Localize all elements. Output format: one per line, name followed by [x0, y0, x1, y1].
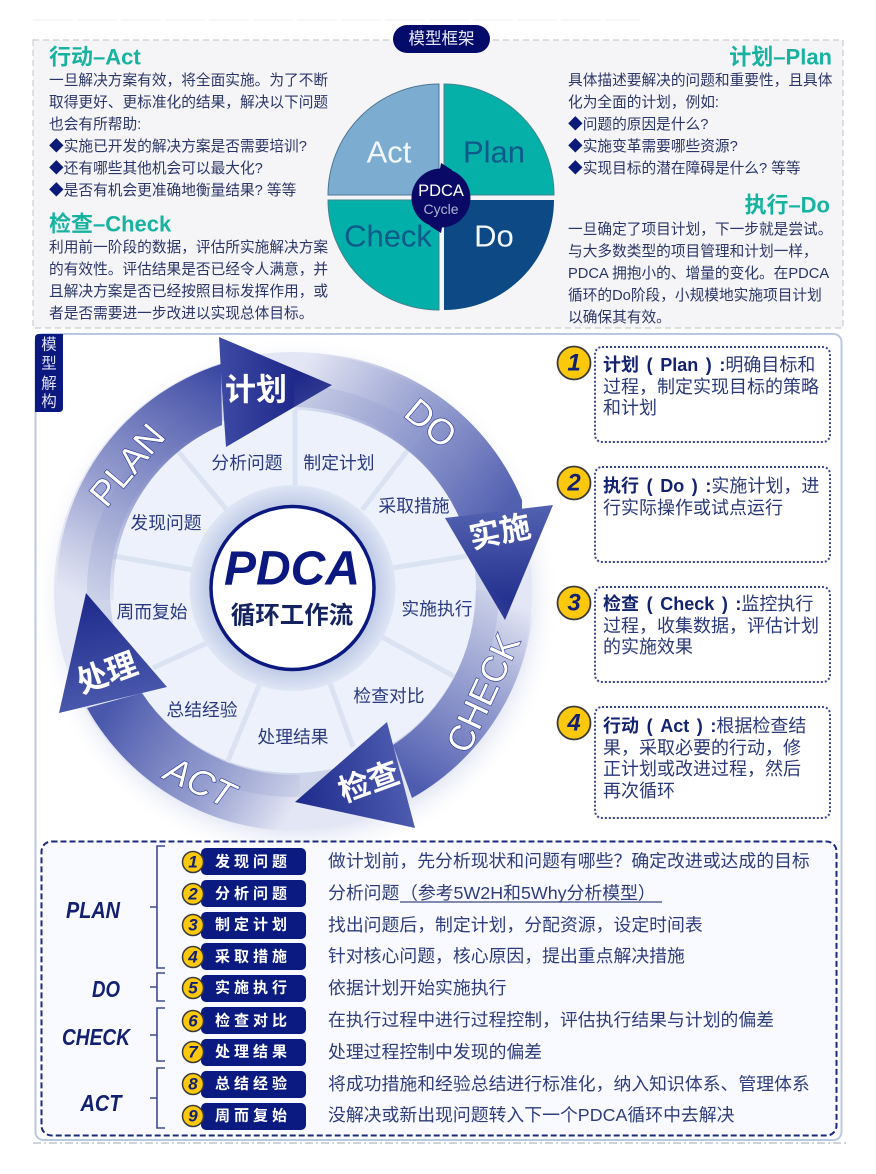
- step 3: [182, 912, 703, 939]
- step 9: 没解决或新出现问题转入下一个PDCA循环中去解决: [328, 1105, 735, 1125]
- wheel segment labels: 处理结果: [257, 727, 329, 747]
- step 6: 在执行过程中进行过程控制，评估执行结果与计划的偏差: [328, 1010, 774, 1030]
- wheel ring base: [83, 381, 503, 801]
- text block: Plan: 具体描述要解决的问题和重要性，且具体: [568, 72, 833, 89]
- text block: Plan: [568, 44, 833, 177]
- wheel disc: [110, 407, 476, 773]
- step 8: 将成功措施和经验总结进行标准化，纳入知识体系、管理体系: [328, 1074, 810, 1094]
- card: step 1 plan: 过程，制定实现目标的策略: [603, 377, 819, 397]
- arrow: plan: PLAN: [81, 416, 173, 514]
- text block: Check: [49, 212, 328, 322]
- panel: model framework: [33, 25, 843, 328]
- text block: Check: 者是否需要进一步改进以实现总体目标。: [49, 305, 313, 322]
- brackets: [150, 846, 165, 1128]
- text block: Plan: 计划–Plan: [729, 44, 832, 70]
- wheel segment labels: [116, 453, 473, 747]
- chart: PDCA pie: Check: [344, 218, 432, 254]
- card: step 1 plan: 计划 ( Plan ) :明确目标和: [603, 355, 815, 375]
- text block: Act: ◆是否有机会更准确地衡量结果? 等等: [49, 181, 297, 199]
- tag: model breakdown: 解: [41, 374, 57, 392]
- text block: Act: 一旦解决方案有效，将全面实施。为了不断: [49, 71, 328, 89]
- step 9: [182, 1103, 735, 1130]
- step 6: 检查对比: [215, 1012, 291, 1030]
- step 8: 8: [188, 1074, 198, 1094]
- text block: Act: ◆还有哪些其他机会可以最大化?: [49, 160, 263, 177]
- text block: Do: 循环的Do阶段，小规模地实施项目计划: [568, 287, 822, 304]
- card: step 2 do: [558, 466, 830, 562]
- text block: Check: 且解决方案是否已经按照目标发挥作用，或: [49, 282, 328, 300]
- chart: PDCA pie: Plan: [463, 134, 525, 170]
- step 3: 制定计划: [215, 916, 291, 934]
- card: step 3 check: 过程，收集数据，评估计划: [603, 616, 819, 636]
- wheel center: 循环工作流: [231, 602, 353, 630]
- step 4: [182, 943, 685, 970]
- step 2: 分析问题: [328, 883, 400, 903]
- phase labels: DO: [92, 976, 120, 1002]
- arrow: plan: [57, 337, 332, 600]
- arrow: do: DO: [397, 390, 465, 456]
- text block: Do: 一旦确定了项目计划，下一步就是尝试。: [568, 221, 832, 238]
- heading pill: model framework: [393, 25, 490, 53]
- step 6: 6: [188, 1012, 198, 1030]
- step 2: [182, 880, 662, 907]
- arrow: act: 处理: [72, 646, 142, 700]
- step 7: 7: [188, 1042, 199, 1062]
- card: step 3 check: 3: [567, 590, 581, 616]
- step 2: 2: [187, 884, 198, 904]
- step 8: 总结经验: [215, 1074, 291, 1092]
- card: step 4 act: [558, 706, 830, 818]
- wheel segment labels: 分析问题: [211, 453, 283, 473]
- wheel hub: [190, 485, 396, 691]
- chart: PDCA pie: Act: [367, 134, 412, 170]
- step 4: 采取措施: [215, 948, 291, 966]
- phase labels: CHECK: [62, 1024, 131, 1050]
- text block: Act: [49, 44, 328, 199]
- card: step 1 plan: 和计划: [603, 398, 657, 418]
- card: step 1 plan: [558, 346, 830, 442]
- text block: Check: 的有效性。评估结果是否已经令人满意，并: [49, 260, 328, 278]
- wheel segment labels: 周而复始: [116, 602, 188, 622]
- text block: Plan: ◆实现目标的潜在障碍是什么? 等等: [568, 159, 801, 177]
- step 4: 4: [187, 948, 198, 966]
- icon: PDCA cycle hub: Cycle: [423, 201, 459, 217]
- text block: Do: 以确保其有效。: [568, 309, 671, 326]
- wheel segment labels: 采取措施: [378, 496, 450, 516]
- tag: model breakdown: 型: [41, 354, 57, 372]
- heading pill: model framework: 模型框架: [408, 29, 474, 48]
- arrow: act: [59, 593, 300, 831]
- wheel segment labels: 发现问题: [130, 513, 202, 533]
- chart: PDCA wheel: [33, 336, 561, 864]
- step 3: 3: [188, 916, 198, 934]
- text block: Check: 检查–Check: [49, 212, 172, 236]
- arrow: check: CHECK: [438, 627, 528, 759]
- step 8: [182, 1071, 810, 1098]
- text block: Act: 行动–Act: [49, 44, 141, 70]
- panel: nine steps table: [42, 842, 836, 1136]
- text block: Plan: ◆实施变革需要哪些资源?: [568, 138, 738, 155]
- step 1: 发现问题: [215, 852, 291, 870]
- wheel segment labels: 实施执行: [401, 599, 473, 619]
- text block: Act: 取得更好、更标准化的结果，解决以下问题: [49, 94, 328, 111]
- step 5: [182, 975, 507, 1002]
- icon: PDCA cycle hub: PDCA: [418, 182, 464, 200]
- wheel segment labels: 制定计划: [303, 453, 375, 473]
- card: step 4 act: 再次循环: [603, 781, 675, 801]
- step 2: 分析问题: [215, 884, 291, 902]
- card: step 1 plan: 1: [567, 350, 581, 376]
- text block: Plan: ◆问题的原因是什么?: [568, 116, 708, 133]
- step 9: 周而复始: [215, 1108, 291, 1124]
- phase labels: [62, 897, 131, 1116]
- arrow: do: 实施: [466, 508, 534, 556]
- text block: Check: 利用前一阶段的数据，评估所实施解决方案: [49, 238, 328, 256]
- text block: Plan: 化为全面的计划，例如:: [568, 93, 719, 111]
- card: step 4 act: 4: [566, 710, 581, 736]
- text block: Act: ◆实施已开发的解决方案是否需要培训?: [49, 137, 307, 155]
- step 1: 做计划前，先分析现状和问题有哪些？确定改进或达成的目标: [328, 851, 810, 871]
- icon: PDCA cycle hub: [412, 163, 470, 233]
- step 4: 针对核心问题，核心原因，提出重点解决措施: [328, 946, 685, 966]
- card: step 3 check: [558, 586, 830, 682]
- arrow: do: [294, 353, 553, 620]
- card: step 4 act: 果，采取必要的行动，修: [603, 738, 801, 758]
- wheel segment labels: 总结经验: [166, 700, 238, 720]
- panel: model breakdown: [33, 334, 842, 1140]
- step 7: 处理过程控制中发现的偏差: [328, 1042, 542, 1062]
- tag: model breakdown: 构: [41, 392, 57, 410]
- step 9: 9: [188, 1106, 198, 1126]
- text block: Do: 与大多数类型的项目管理和计划一样，: [568, 243, 818, 260]
- arrow: act: ACT: [157, 747, 244, 817]
- card: step 3 check: 的实施效果: [603, 637, 693, 657]
- text block: Do: PDCA 拥抱小的、增量的变化。在PDCA: [568, 265, 829, 282]
- chart: PDCA pie: [328, 84, 554, 310]
- arrow: plan: 计划: [225, 372, 287, 408]
- wheel center: PDCA: [224, 542, 360, 596]
- text block: Do: 执行–Do: [744, 192, 830, 218]
- wheel dividers: [113, 410, 467, 763]
- step 3: 找出问题后，制定计划，分配资源，设定时间表: [328, 915, 703, 935]
- step 7: 处理结果: [215, 1042, 291, 1060]
- step 2: （参考5W2H和5Why分析模型）: [400, 883, 656, 903]
- step 5: 依据计划开始实施执行: [328, 978, 507, 998]
- tag: model breakdown: [35, 334, 63, 412]
- text block: Act: 也会有所帮助:: [49, 116, 141, 133]
- card: step 4 act: 正计划或改进过程，然后: [603, 759, 801, 779]
- card: step 2 do: 执行 ( Do ) :实施计划，进: [603, 476, 819, 496]
- step 7: [182, 1039, 542, 1066]
- card: step 3 check: 检查 ( Check ) :监控执行: [603, 593, 813, 614]
- phase labels: PLAN: [66, 897, 120, 923]
- tag: model breakdown: 模: [41, 336, 57, 354]
- arrow: check: [295, 590, 534, 828]
- chart: PDCA pie: Do: [474, 218, 514, 254]
- card: step 2 do: 2: [566, 470, 581, 496]
- card: step 2 do: 行实际操作或试点运行: [603, 498, 783, 518]
- step 1: 1: [188, 852, 198, 872]
- step 5: 5: [188, 978, 198, 998]
- wheel center: [211, 506, 374, 670]
- step 5: 实施执行: [215, 978, 291, 996]
- card: step 4 act: 行动 ( Act ) :根据检查结: [603, 716, 806, 736]
- step 6: [182, 1007, 774, 1034]
- arrow: check: 检查: [334, 755, 404, 809]
- step 1: [182, 848, 810, 875]
- phase labels: ACT: [80, 1090, 123, 1116]
- text block: Do: [568, 192, 832, 326]
- wheel segment labels: 检查对比: [353, 686, 425, 706]
